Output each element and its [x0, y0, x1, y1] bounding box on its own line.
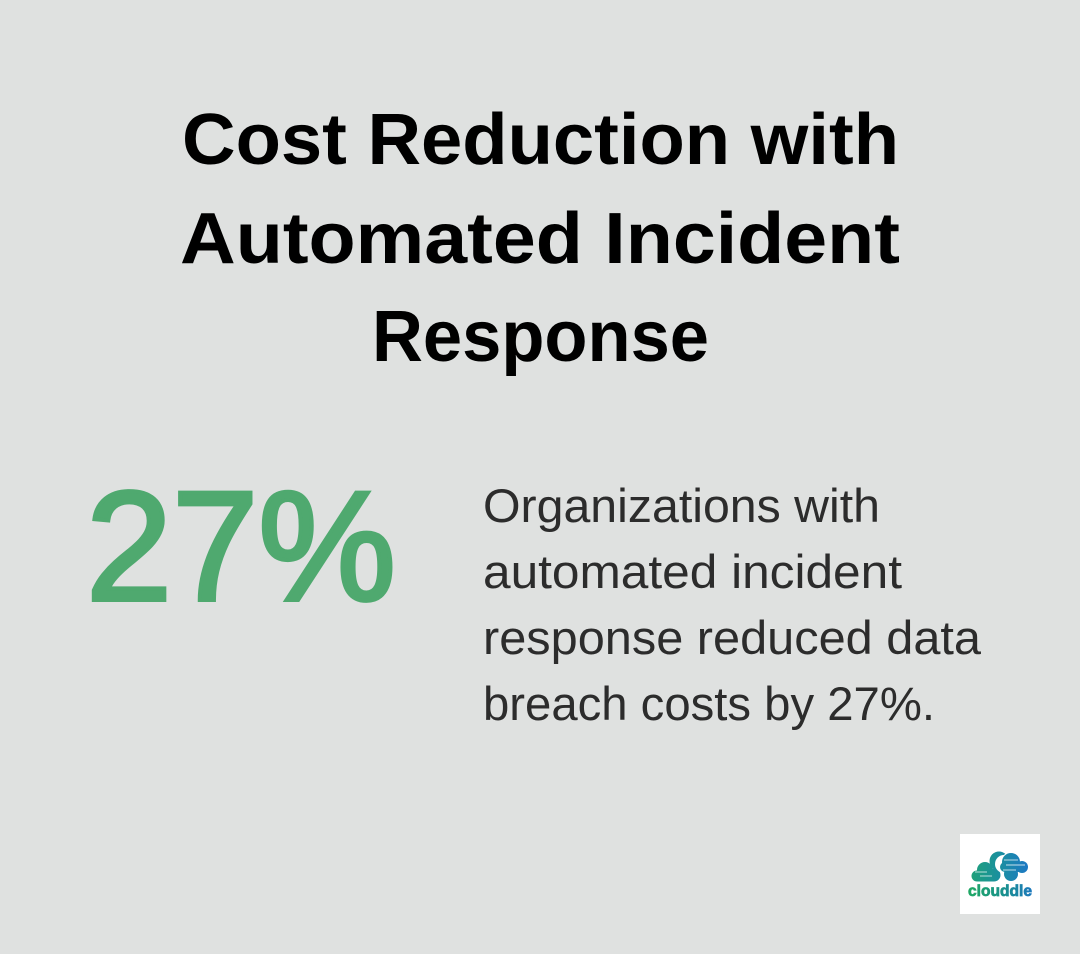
- title: Automated Incident: [180, 199, 900, 279]
- icon: clouds: [972, 852, 1028, 882]
- stat description: automated incident: [483, 545, 902, 598]
- stat description: [483, 479, 982, 730]
- title: [180, 100, 900, 377]
- stat description: Organizations with: [483, 479, 880, 532]
- logo: clouddle: [960, 834, 1040, 914]
- logo wordmark: clouddle: [968, 883, 1032, 900]
- logo background: [960, 834, 1040, 914]
- stat description: breach costs by 27%.: [483, 677, 935, 730]
- big stat: 27%: 27%: [86, 460, 396, 634]
- stat description: response reduced data: [483, 611, 982, 664]
- title: Response: [372, 297, 709, 377]
- title: Cost Reduction with: [182, 100, 899, 180]
